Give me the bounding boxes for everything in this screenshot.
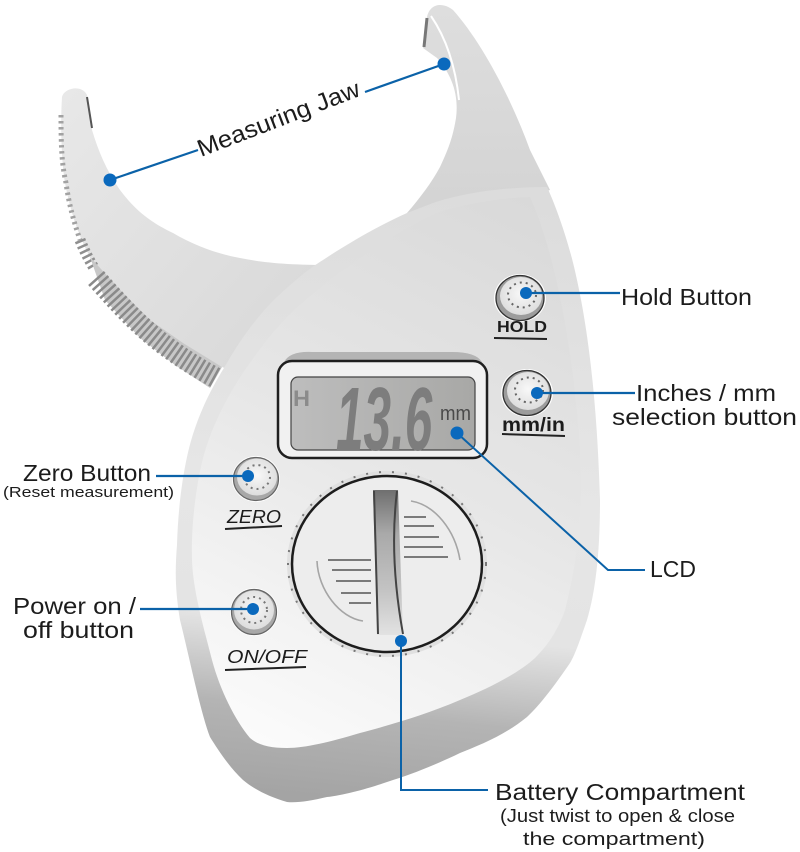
on/off button bbox=[225, 588, 308, 670]
zero button: ZERO bbox=[226, 507, 281, 527]
callout: inches / mm selection button: selection button bbox=[612, 404, 797, 430]
LCD display bbox=[278, 352, 487, 470]
callout: zero button: Zero Button bbox=[23, 460, 151, 486]
callout: LCD bbox=[450, 426, 696, 582]
mm/in button: mm/in bbox=[502, 415, 565, 436]
callout: LCD: LCD bbox=[650, 556, 696, 582]
LCD hold indicator: H bbox=[293, 386, 310, 411]
twist grip slot bbox=[373, 490, 403, 635]
callout: battery compartment: the compartment) bbox=[523, 829, 705, 849]
dial grooves right bbox=[404, 517, 448, 557]
body outer shell bbox=[176, 187, 600, 802]
callout: inches / mm selection button bbox=[531, 380, 797, 430]
LCD reading: 13.6 bbox=[336, 369, 433, 470]
right measuring jaw bbox=[400, 5, 550, 240]
callout: power button bbox=[13, 593, 259, 643]
callout: power button: Power on / bbox=[13, 593, 137, 619]
callout: zero button bbox=[3, 460, 254, 501]
callout: power button: off button bbox=[23, 617, 134, 643]
callout: battery compartment: Battery Compartment bbox=[495, 779, 746, 805]
callout: zero button: (Reset measurement) bbox=[3, 484, 174, 501]
callout: hold button: Hold Button bbox=[621, 284, 752, 310]
body face bbox=[192, 197, 581, 748]
mm/in button bbox=[501, 369, 565, 436]
jaw teeth bbox=[61, 115, 80, 240]
dial arc left bbox=[317, 561, 363, 621]
zero button bbox=[225, 456, 282, 529]
dial arc right bbox=[411, 501, 460, 560]
callout: battery compartment bbox=[395, 635, 746, 849]
callout: inches / mm selection button: Inches / mm bbox=[636, 380, 776, 406]
callout: measuring jaw bbox=[104, 58, 450, 186]
dial grooves left bbox=[328, 560, 371, 603]
callout: measuring jaw: Measuring Jaw bbox=[193, 76, 364, 163]
callout: hold button bbox=[520, 284, 752, 310]
on/off button: ON/OFF bbox=[227, 647, 308, 667]
battery compartment dial bbox=[287, 471, 487, 657]
hold button bbox=[494, 274, 547, 339]
callout: battery compartment: (Just twist to open & close bbox=[500, 806, 735, 826]
caliper body bbox=[176, 187, 600, 802]
left measuring jaw bbox=[61, 88, 330, 400]
LCD unit: mm bbox=[440, 403, 471, 425]
hold button: HOLD bbox=[497, 319, 547, 336]
